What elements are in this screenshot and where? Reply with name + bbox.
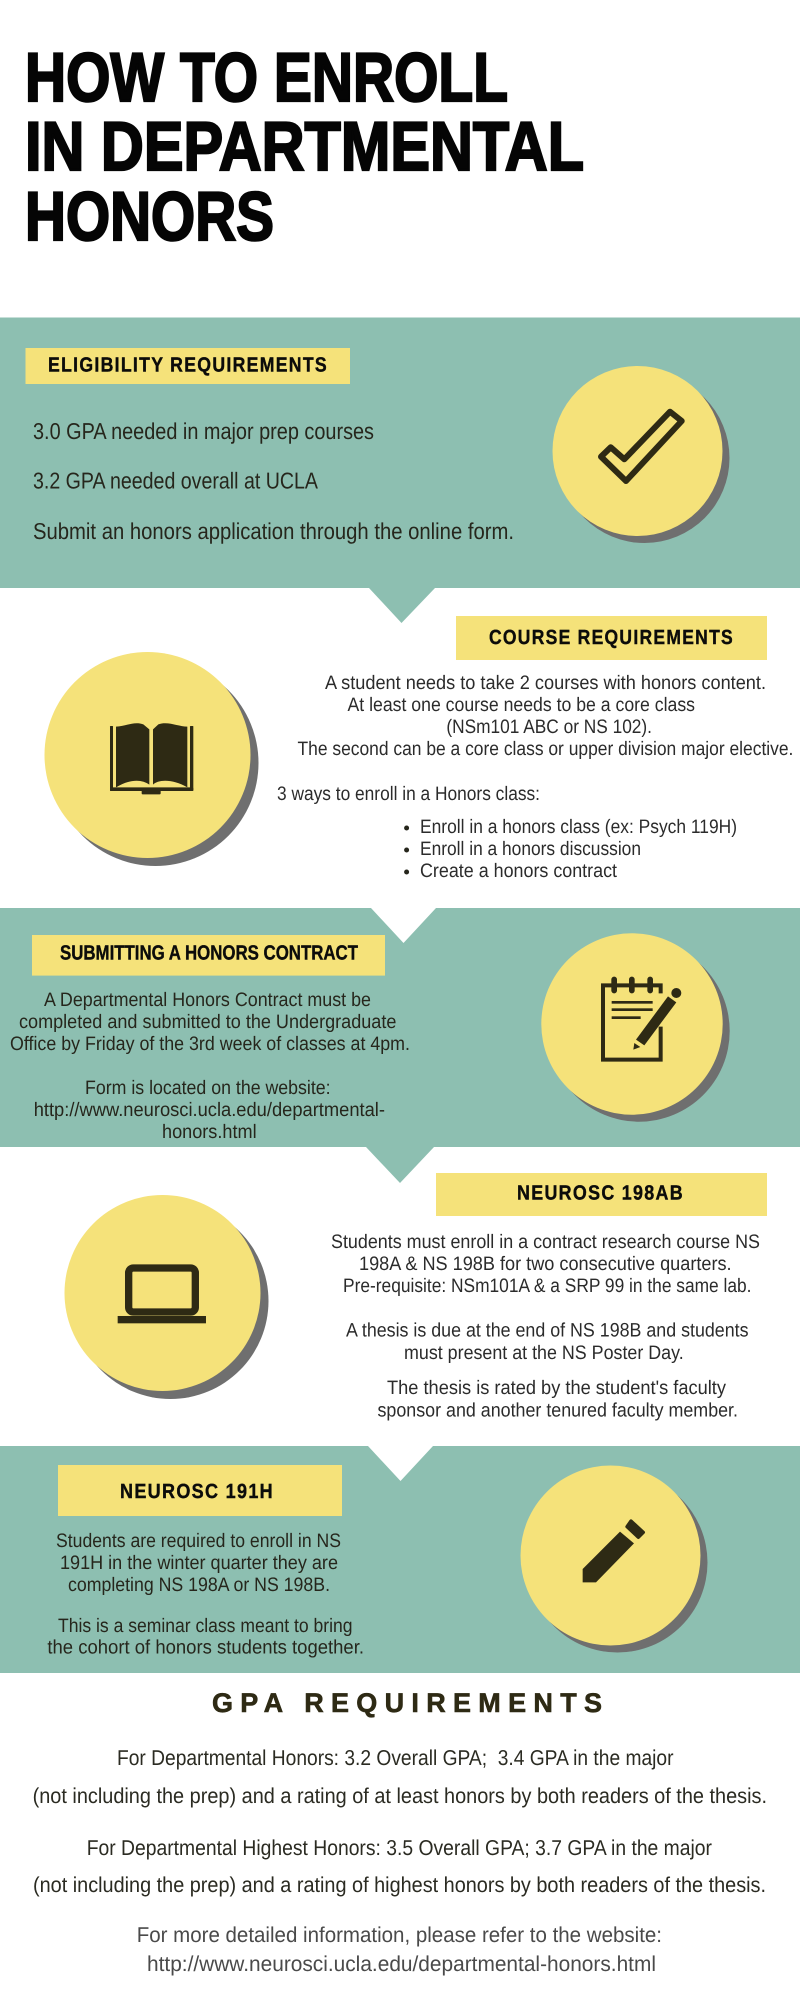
text block: website reference: http://www.neurosci.ucla.edu/departmental-honors.html — [147, 1952, 656, 1976]
icon: pencil in circle — [520, 1466, 708, 1652]
panel: course requirements — [44, 616, 793, 882]
text block: thesis and research course details: Students must enroll in a contract research course NS — [331, 1231, 760, 1253]
heading: neurosc 198ab: NEUROSC 198AB — [517, 1182, 684, 1205]
text block: thesis and research course details: sponsor and another tenured faculty member. — [378, 1400, 738, 1422]
heading: submitting a honors contract: SUBMITTING A HONORS CONTRACT — [60, 942, 358, 965]
text block: thesis and research course details: The thesis is rated by the student's faculty — [387, 1377, 726, 1399]
text block: thesis and research course details: must present at the NS Poster Day. — [404, 1342, 684, 1364]
text block: thesis and research course details: 198A & NS 198B for two consecutive quarters. — [359, 1253, 732, 1275]
list: ways to enroll — [404, 816, 737, 882]
text block: course details: (NSm101 ABC or NS 102). — [446, 716, 652, 738]
heading: submitting a honors contract — [32, 935, 385, 976]
panel: gpa requirements — [33, 1688, 767, 1976]
text block: eligibility list: 3.0 GPA needed in major prep courses — [33, 418, 374, 444]
text block: eligibility list: 3.2 GPA needed overall at UCLA — [33, 468, 319, 494]
title — [25, 39, 584, 255]
text block: course details: At least one course needs to be a core class — [348, 694, 695, 716]
icon: book in circle — [44, 652, 258, 866]
text block: departmental honors: For Departmental Honors: 3.2 Overall GPA; 3.4 GPA in the major — [117, 1746, 674, 1770]
text block: seminar details: 191H in the winter quarter they are — [60, 1552, 338, 1574]
heading: eligibility requirements: ELIGIBILITY REQUIREMENTS — [48, 354, 328, 376]
heading: eligibility requirements — [26, 348, 350, 384]
text block: departmental highest honors — [33, 1836, 766, 1897]
text block: contract details: completed and submitted to the Undergraduate — [19, 1011, 396, 1033]
icon: laptop in circle — [64, 1195, 268, 1399]
text block: course details: A student needs to take 2 courses with honors content. — [325, 672, 766, 694]
text block: contract details: Office by Friday of the 3rd week of classes at 4pm. — [10, 1033, 410, 1055]
panel: neurosc 191h — [0, 1446, 800, 1673]
title: IN DEPARTMENTAL — [25, 108, 584, 185]
text block: course details — [277, 672, 793, 805]
list: ways to enroll: Create a honors contract — [420, 860, 618, 882]
text block: seminar details: Students are required to enroll in NS — [56, 1530, 341, 1552]
text block: departmental honors — [33, 1746, 767, 1808]
title: HONORS — [25, 178, 274, 255]
text block: contract details: honors.html — [162, 1121, 257, 1143]
panel: neurosc 198ab — [64, 1173, 767, 1422]
heading: neurosc 191h: NEUROSC 191H — [120, 1480, 274, 1503]
list: ways to enroll: Enroll in a honors discussion — [420, 838, 641, 860]
heading: neurosc 191h — [58, 1465, 342, 1516]
text block: course details: 3 ways to enroll in a Honors class: — [277, 783, 540, 805]
heading: neurosc 198ab — [436, 1173, 767, 1216]
text block: seminar details — [47, 1530, 364, 1659]
panel: eligibility requirements — [0, 318, 800, 623]
heading: gpa requirements: GPA REQUIREMENTS — [212, 1688, 602, 1718]
text block: seminar details: completing NS 198A or NS 198B. — [68, 1574, 330, 1596]
title: HOW TO ENROLL — [25, 39, 508, 116]
text block: contract details — [10, 989, 410, 1143]
text block: thesis and research course details: A thesis is due at the end of NS 198B and students — [346, 1320, 749, 1342]
heading: course requirements — [456, 616, 767, 660]
icon: check mark in circle — [552, 366, 730, 543]
text block: thesis and research course details: Pre-requisite: NSm101A & a SRP 99 in the same lab. — [343, 1275, 752, 1297]
heading: course requirements: COURSE REQUIREMENTS — [489, 626, 734, 649]
text block: contract details: http://www.neurosci.ucla.edu/departmental- — [34, 1099, 385, 1121]
text block: seminar details: the cohort of honors students together. — [47, 1637, 364, 1659]
text block: website reference — [137, 1923, 662, 1976]
text block: contract details: Form is located on the website: — [85, 1077, 331, 1099]
list: ways to enroll: Enroll in a honors class (ex: Psych 119H) — [420, 816, 737, 838]
text block: eligibility list — [33, 418, 514, 544]
text block: website reference: For more detailed information, please refer to the website: — [137, 1923, 662, 1947]
text block: departmental highest honors: For Departmental Highest Honors: 3.5 Overall GPA; 3.7 GPA in the major — [87, 1836, 712, 1860]
icon: notepad and pencil in circle — [541, 933, 730, 1122]
text block: thesis and research course details — [331, 1231, 760, 1422]
text block: eligibility list: Submit an honors application through the online form. — [33, 518, 514, 544]
text block: contract details: A Departmental Honors Contract must be — [44, 989, 371, 1011]
panel: submitting a honors contract — [0, 908, 800, 1183]
text block: seminar details: This is a seminar class meant to bring — [58, 1615, 352, 1637]
